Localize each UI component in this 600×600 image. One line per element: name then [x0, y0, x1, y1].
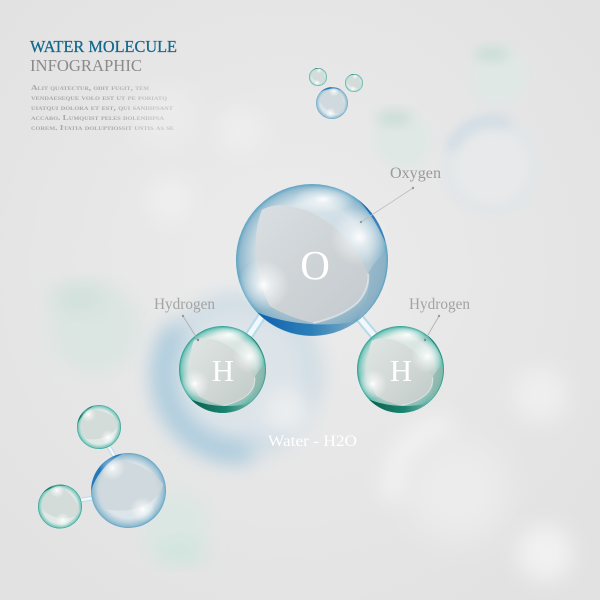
- intro text block: Alit quatectur, odit fugit, tem: [31, 83, 149, 92]
- sphere: right hydrogen: [357, 326, 444, 413]
- sphere: top hydrogen: [68, 397, 129, 457]
- sphere: oxygen: [236, 184, 388, 336]
- small molecule: bottom left: [30, 397, 181, 543]
- letter O: O: [300, 242, 330, 288]
- intro text block: uiatqui dolora et est, qui sandipsant: [31, 103, 174, 112]
- bonds: main molecule: [248, 313, 377, 339]
- label: right hydrogen: Hydrogen: [409, 296, 470, 313]
- letter H: H: [390, 353, 412, 388]
- intro text block: vendaeseque volo est ut pe poriatq: [31, 93, 167, 102]
- label: oxygen: Oxygen: [390, 165, 441, 182]
- sphere: left hydrogen: [179, 326, 266, 413]
- sphere: left hydrogen: [30, 476, 90, 537]
- blurred background bubbles: [49, 47, 573, 581]
- intro text block: accabo. Lumquist peles dolendipsa: [31, 113, 164, 122]
- label: left hydrogen: Hydrogen: [154, 296, 215, 313]
- label: right hydrogen: [409, 296, 470, 341]
- sphere: oxygen: [75, 437, 181, 543]
- letter H: H: [212, 353, 234, 388]
- small molecule: top: [308, 66, 364, 122]
- title: WATER MOLECULE: [30, 37, 177, 56]
- label: left hydrogen: [154, 296, 215, 341]
- caption: water H2O: Water - H2O: [268, 433, 357, 450]
- title: INFOGRAPHIC: [30, 56, 142, 75]
- intro text block: [31, 83, 175, 132]
- intro text block: corem. Itatia doluptiossit untis as se: [31, 123, 175, 132]
- title: [30, 37, 177, 75]
- bonds: [81, 447, 115, 500]
- label: oxygen: [360, 165, 441, 223]
